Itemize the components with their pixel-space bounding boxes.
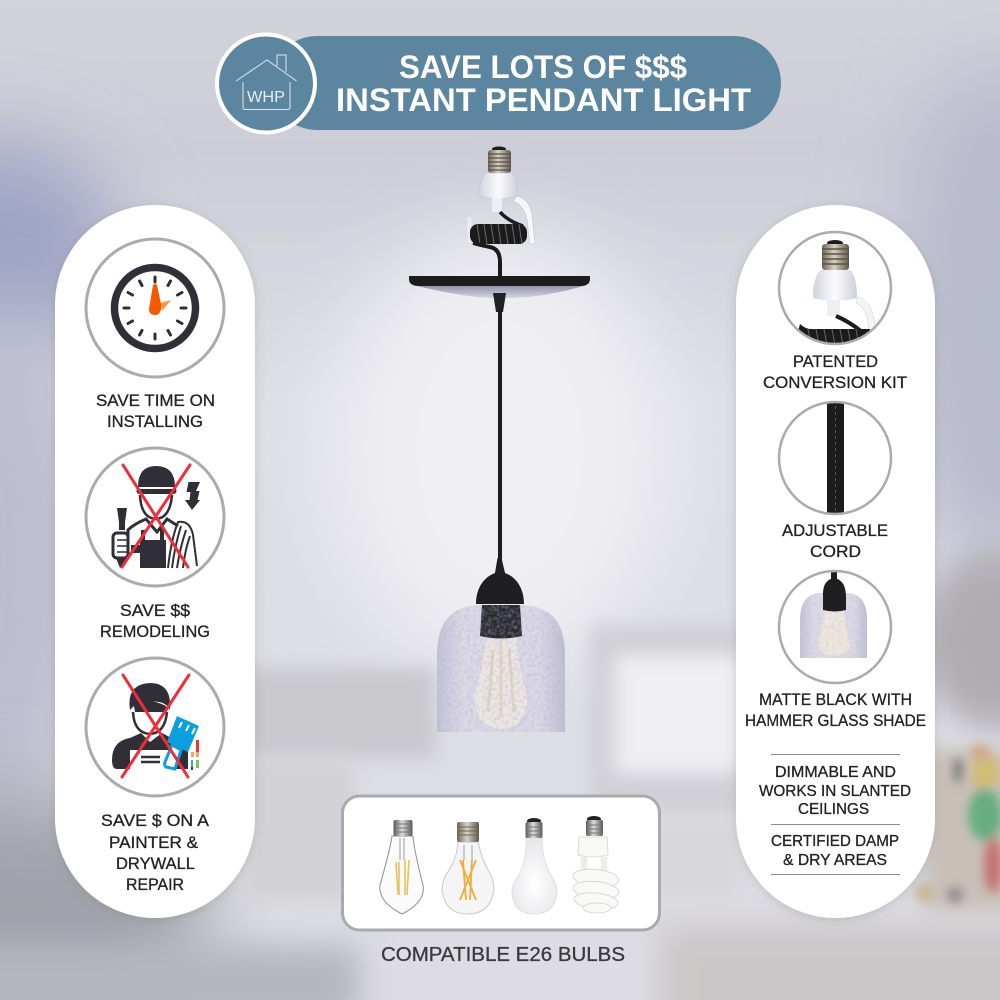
icon: adjustable cord photo: [779, 400, 891, 515]
icon: clock: [86, 239, 224, 377]
black socket cap: [476, 558, 524, 604]
text: adjustable cord: [782, 521, 888, 561]
coiled cord: [470, 217, 527, 277]
text: save painter: [101, 811, 210, 894]
text: matte black: HAMMER GLASS SHADE: [745, 711, 926, 730]
title text: [336, 49, 751, 118]
red cross: [122, 675, 189, 777]
text: dimmable: CEILINGS: [798, 801, 869, 818]
red cross: [122, 465, 190, 567]
panel: right features: [736, 205, 935, 918]
bulb: A19 filament: [442, 822, 494, 914]
text: certified: & DRY AREAS: [783, 852, 887, 869]
text: conversion kit: CONVERSION KIT: [763, 373, 907, 392]
text: adjustable cord: ADJUSTABLE: [782, 521, 888, 540]
icon: crossed painter: [86, 658, 224, 796]
text: matte black: [745, 690, 926, 730]
text: save time: INSTALLING: [107, 412, 203, 431]
floor: [660, 925, 1000, 1000]
bulb: spiral CFL: [572, 816, 620, 913]
text: save remodeling: REMODELING: [100, 622, 210, 641]
bulb: ST filament: [380, 820, 423, 914]
text: save painter: REPAIR: [126, 875, 184, 894]
bulb inside: [475, 636, 527, 729]
icon: crossed electrician: [86, 448, 224, 586]
text: dimmable: [759, 764, 911, 818]
text: save time: SAVE TIME ON: [96, 391, 215, 410]
pendant light: [409, 146, 590, 732]
panel: left benefits: [55, 205, 255, 918]
text: save time: [96, 391, 215, 431]
icon: glass shade photo: [779, 570, 891, 683]
text: matte black: MATTE BLACK WITH: [759, 690, 912, 709]
icon: conversion kit photo: [779, 232, 891, 360]
text: adjustable cord: CORD: [810, 542, 861, 561]
text: save remodeling: [100, 601, 210, 641]
text: conversion kit: PATENTED: [793, 352, 878, 371]
left window frame band: [245, 668, 435, 758]
text: save painter: DRYWALL: [116, 854, 195, 873]
text: certified: [771, 833, 899, 869]
cord: [498, 308, 502, 560]
logo: WHP house: [217, 34, 315, 132]
title banner: [270, 36, 781, 130]
text: save painter: PAINTER &: [109, 833, 199, 852]
text: dimmable: DIMMABLE AND: [775, 764, 896, 781]
glass shade: [437, 605, 565, 732]
panel: compatible bulbs: [342, 796, 660, 930]
caption: compatible bulbs: COMPATIBLE E26 BULBS: [381, 944, 625, 966]
logo: WHP house: WHP: [247, 89, 285, 106]
title text: INSTANT PENDANT LIGHT: [336, 82, 751, 118]
title text: SAVE LOTS OF $$$: [399, 49, 687, 85]
text: save painter: SAVE $ ON A: [101, 811, 210, 830]
text: dimmable: WORKS IN SLANTED: [759, 783, 911, 800]
ceiling canopy disc: [409, 276, 590, 312]
shelf with colourful objects: [925, 750, 1000, 910]
right window: [590, 625, 750, 815]
text: certified: CERTIFIED DAMP: [771, 833, 899, 850]
conversion kit socket: [479, 146, 535, 244]
bulb: frosted: [512, 818, 557, 914]
text: conversion kit: [763, 352, 907, 392]
text: save remodeling: SAVE $$: [120, 601, 191, 620]
